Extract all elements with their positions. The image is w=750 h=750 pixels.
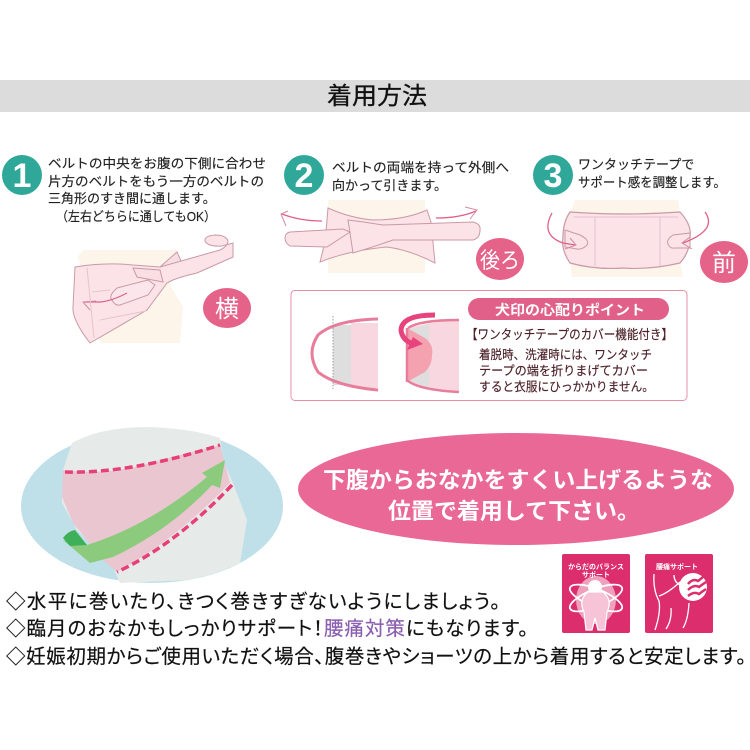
step 1 text bbox=[48, 156, 266, 224]
point heading pill bbox=[468, 298, 669, 320]
step 1 number badge: 1 bbox=[13, 157, 31, 195]
step 1 text: 片方のベルトをもう一方のベルトの bbox=[48, 174, 264, 189]
icon: body balance support: サポート bbox=[582, 571, 610, 579]
step 1 text: 三角形のすき間に通します。 bbox=[48, 191, 216, 206]
title band: 着用方法 bbox=[327, 83, 427, 110]
diagram: tape folded with arrow bbox=[401, 315, 459, 392]
step 2 number badge bbox=[284, 155, 324, 195]
notes bbox=[6, 590, 746, 668]
step 3 number badge: 3 bbox=[544, 157, 562, 195]
callout ellipse: 位置で着用して下さい。 bbox=[388, 499, 640, 524]
illustration: belt position on body bbox=[21, 427, 283, 583]
label: back: 後ろ bbox=[480, 248, 520, 273]
label: front: 前 bbox=[712, 250, 736, 277]
panel: care point bbox=[291, 290, 687, 400]
notes: ◇水平に巻いたり、きつく巻きすぎないようにしましょう。 bbox=[6, 590, 500, 613]
point body bbox=[479, 347, 654, 394]
illustration: belt front view bbox=[548, 200, 709, 277]
step 1 number badge bbox=[2, 155, 42, 195]
step 2 text bbox=[332, 160, 509, 193]
point subheading: 【ワンタッチテープのカバー機能付き】 bbox=[466, 327, 673, 342]
illustration: belt back view bbox=[281, 200, 480, 273]
icon: back pain support bbox=[645, 554, 713, 633]
step 2 number badge: 2 bbox=[295, 157, 313, 195]
step 3 text bbox=[578, 157, 726, 190]
step 3 number badge bbox=[533, 155, 573, 195]
step 2 text: 向かって引きます。 bbox=[332, 178, 447, 193]
label: side: 横 bbox=[215, 296, 239, 323]
point body: テープの端を折りまげてカバー bbox=[479, 363, 648, 378]
step 2 text: ベルトの両端を持って外側へ bbox=[332, 160, 509, 175]
step 3 text: サポート感を調整します。 bbox=[578, 175, 726, 190]
notes: ◇妊娠初期からご使用いただく場合、腹巻きやショーツの上から着用すると安定します。 bbox=[6, 645, 746, 668]
step 3 text: ワンタッチテープで bbox=[578, 157, 694, 172]
icon: body balance support bbox=[562, 554, 630, 633]
point body: すると衣服にひっかかりません。 bbox=[479, 380, 654, 394]
diagram: tape before folding bbox=[312, 316, 378, 390]
label: front bbox=[700, 241, 748, 283]
illustration: belt side view bbox=[73, 235, 233, 343]
label: side bbox=[203, 288, 251, 328]
step 1 text: （左右どちらに通してもOK） bbox=[56, 209, 216, 224]
callout ellipse bbox=[298, 433, 734, 545]
title band bbox=[0, 80, 750, 112]
label: back bbox=[476, 238, 524, 280]
point body: 着脱時、洗濯時には、ワンタッチ bbox=[479, 347, 652, 362]
icon: body balance support: からだのバランス bbox=[568, 563, 624, 571]
step 1 text: ベルトの中央をお腹の下側に合わせ bbox=[48, 156, 266, 171]
point heading pill: 犬印の心配りポイント bbox=[495, 302, 645, 318]
callout ellipse: 下腹からおなかをすくい上げるような bbox=[323, 468, 713, 493]
icon: back pain support: 腰痛サポート bbox=[656, 562, 698, 571]
notes: ◇臨月のおなかもしっかりサポート！腰痛対策にもなります。 bbox=[6, 617, 528, 640]
